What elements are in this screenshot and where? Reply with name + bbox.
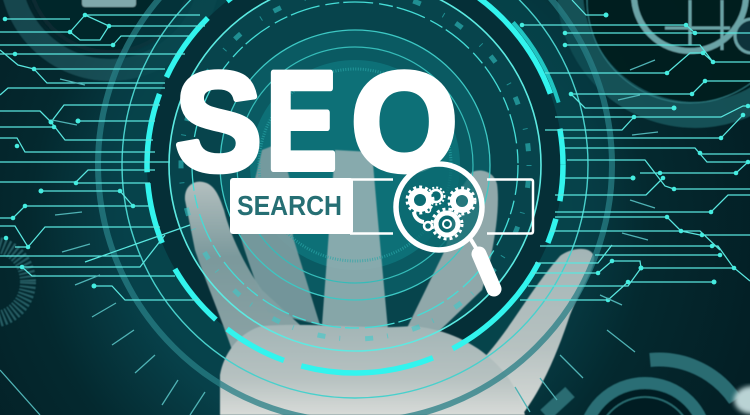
search bar	[230, 178, 533, 234]
search button	[230, 178, 353, 234]
lens	[396, 164, 482, 250]
circuit nodes	[3, 12, 750, 302]
gears	[407, 187, 475, 239]
letter E: E	[266, 43, 337, 199]
SEO title	[175, 43, 458, 200]
circuit lines right	[520, 0, 750, 300]
handle	[470, 238, 476, 248]
concentric rings	[98, 0, 612, 415]
hand	[185, 143, 594, 415]
finger: left	[185, 182, 300, 350]
thumb	[470, 249, 594, 415]
letter O: O	[351, 45, 458, 200]
finger: right	[406, 170, 498, 336]
letter S: S	[175, 44, 262, 200]
search bar outline	[350, 180, 533, 234]
icon: magnifying glass with gears	[396, 164, 494, 289]
central concentric disc	[98, 0, 612, 415]
circuit lines left	[0, 15, 205, 300]
short radial ticks	[0, 60, 658, 415]
finger: middle	[322, 150, 388, 330]
palm	[220, 325, 525, 415]
finger: second	[240, 143, 320, 325]
search label: SEARCH	[237, 190, 342, 221]
